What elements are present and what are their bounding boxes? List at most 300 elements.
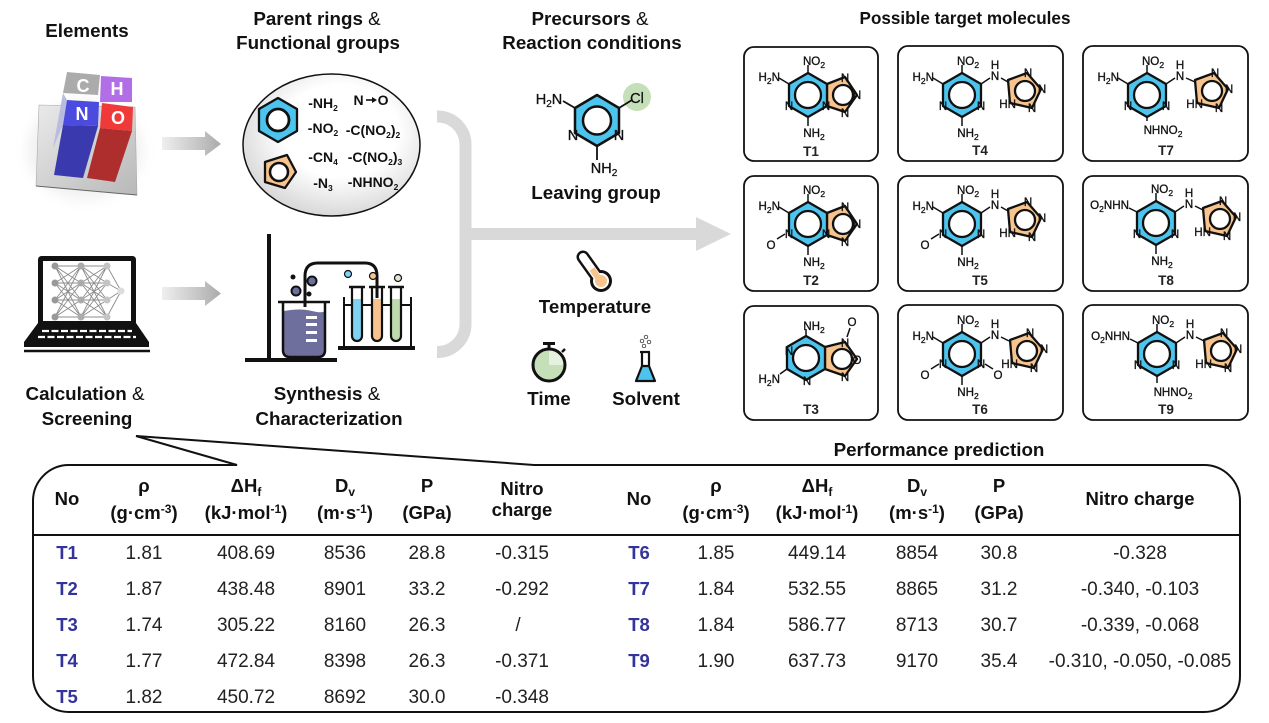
panel: T6: H: [913, 330, 921, 343]
table header: left: Nitro: [500, 478, 544, 499]
panel: T7: N: [1162, 100, 1170, 113]
table rows: left: 8692: [324, 687, 366, 708]
panel: T4: H: [991, 59, 999, 72]
table rows: right: 532.55: [788, 579, 846, 600]
icon: stopwatch: [533, 342, 565, 381]
panel: T9: N: [1186, 329, 1194, 342]
table rows: left: /: [515, 615, 521, 636]
functional group labels: ): [393, 149, 398, 165]
table rows: right: [628, 542, 1231, 672]
heading: Calculation and Screening: Calculation &: [26, 383, 145, 404]
panel: T7: 2: [1106, 76, 1111, 86]
panel: T6: 2: [974, 391, 979, 401]
panel: T4: NH: [957, 127, 974, 140]
table header: right: v: [920, 485, 927, 499]
panel: T8: O: [1090, 199, 1099, 212]
table rows: right: 1.90: [698, 651, 734, 672]
panel: T6: N: [939, 358, 947, 371]
panel: T8: H: [1185, 187, 1193, 200]
panel: T7: NHNO: [1144, 124, 1178, 137]
functional group labels: -N: [313, 175, 328, 191]
functional group labels: -NH: [308, 95, 333, 111]
molecule: leaving group precursor: H: [536, 92, 546, 108]
table rows: right: 8865: [896, 579, 938, 600]
panel: parent rings and functional groups: [243, 74, 420, 216]
panel: T3: NH: [803, 320, 820, 333]
table rows: right: 586.77: [788, 615, 846, 636]
icon: CHNO element blocks: [27, 72, 143, 200]
panel: T2: 2: [820, 261, 825, 271]
panel: T4: NO: [957, 55, 974, 68]
molecule: leaving group precursor: N: [614, 128, 624, 144]
panel: T3: N: [841, 371, 849, 384]
table rows: left: 1.81: [126, 543, 162, 564]
table rows: left: T5: [56, 686, 78, 707]
table rows: right: 8854: [896, 543, 939, 564]
table rows: left: 1.74: [126, 615, 163, 636]
panel: T2: NO: [803, 184, 820, 197]
label: Solvent: Solvent: [612, 388, 681, 409]
panel: T9: 2: [1188, 391, 1193, 401]
panel: T9: N: [1224, 362, 1232, 375]
table rows: left: 33.2: [409, 579, 445, 600]
panel: T2: N: [853, 218, 861, 231]
panel: T5: O: [920, 239, 930, 252]
table rows: left: 438.48: [217, 579, 275, 600]
panel: T3: 2: [767, 378, 772, 388]
table header: left: -1: [356, 502, 367, 516]
arrow: elements to parent rings: [162, 131, 221, 156]
panel: T6: N: [1030, 362, 1038, 375]
panel: T2: NH: [803, 256, 820, 269]
panel: T5: [898, 176, 1063, 291]
panel: T8: 2: [1168, 260, 1173, 270]
panel: T9: NHNO: [1154, 386, 1188, 399]
panel: T1: 2: [820, 60, 825, 70]
functional group labels: 4: [333, 157, 338, 167]
panel: T9: HN: [1195, 358, 1212, 371]
panel: T2: O: [766, 239, 776, 252]
functional group labels: [308, 92, 403, 193]
panel: T5: N: [991, 199, 999, 212]
functional group labels: 3: [328, 183, 333, 193]
panel: T8: T8: [1158, 273, 1174, 288]
panel: T8: N: [1223, 230, 1231, 243]
panel: T6: 2: [921, 335, 926, 345]
panel: T6: T6: [972, 402, 988, 417]
panel: T6: O: [993, 369, 1003, 382]
panel: T2: N: [822, 228, 830, 241]
panel: T9: N: [1234, 343, 1242, 356]
panel: T2: N: [772, 200, 780, 213]
table header: left: -1: [270, 502, 281, 516]
panel: T5: NH: [957, 256, 974, 269]
panel: T6: N: [1040, 343, 1048, 356]
panel: T9: T9: [1158, 402, 1174, 417]
table header: right: (kJ·mol: [776, 502, 841, 523]
molecule: leaving group precursor: NH: [591, 161, 612, 177]
heading: Parent rings and functional groups: [236, 8, 400, 53]
icon: laptop with neural network: [24, 258, 150, 351]
table rows: left: 1.87: [126, 579, 162, 600]
heading: Parent rings and functional groups: Functional groups: [236, 32, 400, 53]
panel: T9: O: [1091, 330, 1100, 343]
panel: T1: 2: [767, 76, 772, 86]
panel: T8: NHN: [1104, 199, 1129, 212]
panel: T5: N: [926, 200, 934, 213]
icon: pentagon ring: [265, 155, 296, 188]
panel: T6: H: [991, 318, 999, 331]
table header: left: ): [171, 502, 178, 523]
table rows: right: -0.310, -0.050, -0.085: [1049, 651, 1231, 672]
panel: T2: [744, 176, 878, 291]
arrow: merging gray bracket to targets: [437, 116, 731, 352]
icon: CHNO element blocks: N: [76, 104, 88, 124]
table rows: left: -0.292: [495, 579, 549, 600]
panel: T4: [898, 46, 1063, 161]
panel: T7: NO: [1142, 55, 1159, 68]
panel: T7: H: [1176, 59, 1184, 72]
functional group labels: 2: [396, 130, 401, 140]
panel: T5: H: [913, 200, 921, 213]
panel: T2: H: [759, 200, 767, 213]
table header: left: (kJ·mol: [205, 502, 270, 523]
panel: T3: N: [772, 373, 780, 386]
panel: T8: 2: [1168, 188, 1173, 198]
panel: T7: HN: [1186, 98, 1203, 111]
panel: T4: N: [1028, 102, 1036, 115]
heading: Possible target molecules: Possible target molecules: [860, 9, 1070, 28]
table header: left: f: [257, 485, 262, 499]
functional group labels: -C(NO: [348, 149, 388, 165]
panel: T6: HN: [1001, 358, 1018, 371]
table header: left: ΔH: [231, 475, 257, 496]
panel: T9: [1083, 305, 1248, 420]
panel: T8: N: [1171, 228, 1179, 241]
panel: T1: N: [785, 100, 793, 113]
table header: right: -1: [928, 502, 939, 516]
table rows: right: 1.85: [698, 543, 734, 564]
panel: T5: NO: [957, 184, 974, 197]
panel: T3: 2: [820, 325, 825, 335]
table header: right: f: [828, 485, 833, 499]
panel: T1: NO: [803, 55, 820, 68]
table rows: right: 1.84: [698, 615, 735, 636]
table rows: left: 8901: [324, 579, 366, 600]
table header: left: charge: [492, 499, 552, 520]
table rows: left: 8398: [324, 651, 366, 672]
panel: T6: O: [920, 369, 930, 382]
panel: T5: N: [939, 228, 947, 241]
table rows: right: T7: [628, 578, 650, 599]
panel: T3: N: [785, 345, 793, 358]
table rows: right: 30.8: [981, 543, 1017, 564]
table header: left: v: [348, 485, 355, 499]
panel: T4: N: [1024, 67, 1032, 80]
table header: right: ): [743, 502, 750, 523]
panel: T5: 2: [974, 261, 979, 271]
table header: right: No: [627, 488, 651, 509]
table rows: left: T3: [56, 614, 78, 635]
panel: T3: N: [841, 337, 849, 350]
functional group labels: 2: [394, 182, 399, 192]
table rows: left: 26.3: [409, 615, 445, 636]
table header: left: ): [281, 502, 287, 523]
panel: T3: N: [803, 375, 811, 388]
table rows: left: 8536: [324, 543, 366, 564]
molecule: leaving group precursor: N: [552, 92, 562, 108]
functional group labels: 2: [333, 128, 338, 138]
functional group labels: N O: [353, 92, 389, 108]
table header: right: ρ: [710, 475, 722, 496]
table rows: left: 30.0: [409, 687, 445, 708]
functional group labels: -NHNO: [348, 174, 394, 190]
panel: T9: N: [1220, 327, 1228, 340]
molecule: leaving group precursor: Cl: [630, 91, 644, 107]
panel: T2: 2: [820, 189, 825, 199]
panel: T6: [898, 305, 1063, 420]
panel: T8: [1083, 176, 1248, 291]
heading: Precursors and reaction conditions: Precursors &: [532, 8, 649, 29]
panel: T7: N: [1225, 83, 1233, 96]
panel: T5: H: [991, 188, 999, 201]
panel: T1: N: [822, 100, 830, 113]
functional group labels: 2: [386, 130, 391, 140]
panel: T1: N: [772, 71, 780, 84]
table header: left: No: [55, 488, 79, 509]
table header: right: (m·s: [889, 502, 928, 523]
functional group labels: -NO: [308, 120, 333, 136]
icon: CHNO element blocks: O: [111, 108, 125, 128]
heading: Precursors and reaction conditions: Reaction conditions: [502, 32, 682, 53]
icon: thermometer: [583, 257, 612, 292]
molecule: leaving group precursor: 2: [612, 168, 618, 179]
table header: left: (g·cm: [110, 502, 161, 523]
panel: T8: NH: [1151, 255, 1168, 268]
table rows: left: [56, 542, 549, 708]
table rows: right: T9: [628, 650, 650, 671]
functional group labels: -C(NO: [346, 122, 386, 138]
table header: right: D: [907, 475, 920, 496]
table rows: left: 450.72: [217, 687, 275, 708]
panel: T1: NH: [803, 127, 820, 140]
panel: T7: 2: [1178, 129, 1183, 139]
functional group labels: -CN: [308, 149, 333, 165]
table rows: right: -0.328: [1113, 543, 1167, 564]
heading: Performance prediction: Performance prediction: [834, 439, 1044, 460]
label: Temperature: Temperature: [539, 296, 651, 317]
table rows: right: 30.7: [981, 615, 1017, 636]
panel: T3: O: [847, 316, 857, 329]
table header: right: -1: [841, 502, 852, 516]
molecule: leaving group precursor: N: [568, 128, 578, 144]
heading: Calculation and Screening: Screening: [42, 408, 132, 429]
table header: right: (GPa): [974, 502, 1024, 523]
table rows: right: 35.4: [981, 651, 1018, 672]
panel: T3: O: [852, 354, 862, 367]
icon: lab apparatus: [245, 234, 415, 362]
panel: T4: 2: [974, 60, 979, 70]
panel: T8: NO: [1151, 183, 1168, 196]
panel: T7: N: [1176, 70, 1184, 83]
panel: T7: T7: [1158, 143, 1174, 158]
table header: left: (m·s: [317, 502, 356, 523]
heading: Synthesis and Characterization: [255, 383, 403, 429]
table header: right: P: [993, 475, 1005, 496]
panel: T2: N: [841, 236, 849, 249]
panel: T5: N: [977, 228, 985, 241]
label: Time: Time: [527, 388, 571, 409]
table header: left: -3: [161, 502, 172, 516]
functional group labels: 2: [333, 103, 338, 113]
table rows: right: 31.2: [981, 579, 1017, 600]
panel: T6: N: [991, 329, 999, 342]
table rows: left: T2: [56, 578, 78, 599]
table rows: left: 28.8: [409, 543, 445, 564]
heading: Synthesis and Characterization: Synthesis &: [274, 383, 381, 404]
panel: T8: N: [1133, 228, 1141, 241]
panel: T9: NHN: [1105, 330, 1130, 343]
panel: T9: N: [1172, 359, 1180, 372]
heading: Precursors and reaction conditions: [502, 8, 682, 53]
table rows: right: 8713: [896, 615, 938, 636]
table rows: left: 8160: [324, 615, 366, 636]
panel: T2: N: [785, 228, 793, 241]
icon: flask: [636, 335, 655, 381]
panel: T7: N: [1215, 102, 1223, 115]
panel: T6: NO: [957, 314, 974, 327]
callout table frame: [33, 436, 1240, 712]
functional group labels: 3: [398, 157, 403, 167]
table header: right: (g·cm: [682, 502, 733, 523]
table header: left: (GPa): [402, 502, 452, 523]
panel: T4: 2: [974, 132, 979, 142]
table rows: left: 305.22: [217, 615, 275, 636]
table rows: left: 26.3: [409, 651, 445, 672]
panel: T4: N: [977, 100, 985, 113]
panel: T7: N: [1211, 67, 1219, 80]
functional group labels: 2: [388, 157, 393, 167]
panel: T9: 2: [1100, 335, 1105, 345]
panel: T3: H: [759, 373, 767, 386]
panel: T7: H: [1098, 71, 1106, 84]
panel: T5: T5: [972, 273, 988, 288]
panel: T4: N: [926, 71, 934, 84]
panel: T1: T1: [803, 144, 819, 159]
heading: Elements: Elements: [45, 20, 129, 41]
panel: T2: 2: [767, 205, 772, 215]
panel: T4: T4: [972, 143, 988, 158]
table rows: right: 1.84: [698, 579, 735, 600]
table rows: right: T6: [628, 542, 650, 563]
table header: left: ): [367, 502, 373, 523]
panel: T7: N: [1124, 100, 1132, 113]
panel: T8: N: [1185, 198, 1193, 211]
panel: T7: 2: [1159, 60, 1164, 70]
panel: T9: NO: [1152, 314, 1169, 327]
table rows: right: 449.14: [788, 543, 846, 564]
heading: Calculation and Screening: [26, 383, 145, 429]
panel: T6: N: [977, 358, 985, 371]
table rows: left: T1: [56, 542, 78, 563]
panel: T4: N: [1038, 83, 1046, 96]
panel: T5: 2: [974, 189, 979, 199]
table header: right: [627, 475, 1194, 523]
panel: T2: T2: [803, 273, 819, 288]
panel: T8: HN: [1194, 226, 1211, 239]
arrow: calculation to synthesis: [162, 281, 221, 306]
panel: T1: N: [841, 72, 849, 85]
panel: T2: N: [841, 201, 849, 214]
panel: T1: [744, 47, 878, 161]
icon: CHNO element blocks: H: [110, 79, 124, 99]
molecule: leaving group precursor: [536, 83, 651, 179]
panel: T6: N: [926, 330, 934, 343]
panel: T7: [1083, 46, 1248, 161]
table rows: left: 1.77: [126, 651, 162, 672]
table rows: left: 408.69: [217, 543, 275, 564]
table rows: left: 1.82: [126, 687, 162, 708]
panel: T6: NH: [957, 386, 974, 399]
icon: hexagon ring: [259, 98, 297, 142]
panel: T6: 2: [974, 319, 979, 329]
panel: T1: N: [841, 107, 849, 120]
table rows: left: -0.371: [495, 651, 549, 672]
label: Leaving group: Leaving group: [531, 182, 661, 203]
table header: right: -3: [733, 502, 744, 516]
panel: T5: 2: [921, 205, 926, 215]
table header: right: ): [852, 502, 858, 523]
table header: left: ρ: [138, 475, 150, 496]
panel: T9: N: [1134, 359, 1142, 372]
panel: T5: N: [1028, 231, 1036, 244]
panel: T3: [744, 306, 878, 420]
table header: right: ): [939, 502, 945, 523]
table header: left: P: [421, 475, 433, 496]
table rows: left: T4: [56, 650, 79, 671]
table header: left: [55, 475, 552, 523]
panel: T5: HN: [999, 227, 1016, 240]
table header: right: Nitro charge: [1086, 488, 1194, 509]
panel: T4: N: [939, 100, 947, 113]
panel: T7: N: [1111, 71, 1119, 84]
table rows: right: -0.340, -0.103: [1081, 579, 1199, 600]
panel: T8: N: [1219, 195, 1227, 208]
functional group labels: ): [391, 122, 396, 138]
table rows: left: -0.315: [495, 543, 549, 564]
panel: T4: H: [913, 71, 921, 84]
panel: T1: 2: [820, 132, 825, 142]
panel: T4: N: [991, 70, 999, 83]
panel: T1: N: [853, 89, 861, 102]
panel: T8: 2: [1099, 204, 1104, 214]
panel: T6: N: [1026, 327, 1034, 340]
molecule: leaving group precursor: 2: [546, 99, 552, 110]
panel: T5: N: [1024, 196, 1032, 209]
panel: T8: N: [1233, 211, 1241, 224]
icon: CHNO element blocks: C: [76, 76, 90, 96]
table rows: right: 9170: [896, 651, 938, 672]
panel: T9: H: [1186, 318, 1194, 331]
panel: T4: HN: [999, 98, 1016, 111]
panel: T4: 2: [921, 76, 926, 86]
panel: T1: H: [759, 71, 767, 84]
heading: Parent rings and functional groups: Parent rings &: [253, 8, 381, 29]
table rows: right: 637.73: [788, 651, 846, 672]
table header: left: D: [335, 475, 348, 496]
table rows: right: T8: [628, 614, 650, 635]
table header: right: ΔH: [802, 475, 828, 496]
